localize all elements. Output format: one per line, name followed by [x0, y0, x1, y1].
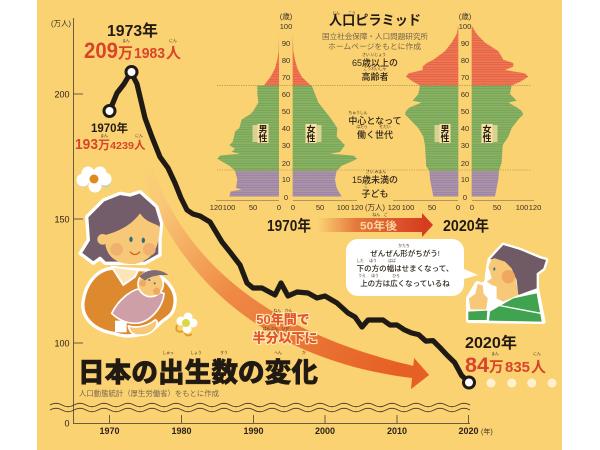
callout: 2020: 84 — [465, 354, 489, 377]
pyramid heading: こう — [348, 10, 356, 16]
age group label: working: はたら — [356, 124, 368, 129]
pyramid age labels 1970: 90 — [282, 39, 290, 48]
pyramid age labels 1970: 0 — [284, 193, 288, 202]
pyramid age labels 1970 — [280, 11, 293, 202]
age group label: working — [348, 110, 402, 140]
callout: 1973: 人 — [166, 45, 181, 62]
line chart: births — [104, 66, 474, 388]
arrow: 50 years later — [318, 212, 433, 237]
pyramid age labels 2020: 30 — [461, 141, 469, 150]
x axis labels: 1990 — [243, 426, 264, 436]
pyramid age labels 1970: 10 — [282, 175, 290, 184]
pyramid age labels 1970: 40 — [282, 124, 290, 133]
callout: 2020: 万 — [489, 360, 504, 376]
pyramid source: ホームページをもとに作成 — [328, 42, 422, 51]
pyramid scale labels: 50 — [428, 203, 436, 212]
gender label: male 1970: 男 — [258, 124, 268, 134]
age group label: elderly: 高齢者 — [361, 71, 389, 82]
gender label: female 1970: 女 — [306, 124, 316, 134]
speech bubble: ほう — [371, 273, 379, 278]
age group label: working: ちゅうしん — [349, 110, 368, 115]
x axis labels: 2020 — [458, 426, 479, 436]
speech bubble: ほう — [369, 258, 377, 263]
mother body — [83, 267, 175, 336]
speech bubble: した — [356, 258, 364, 263]
gender label: male 2020 — [434, 124, 450, 144]
pyramid age labels 1970: 100 — [280, 22, 292, 31]
callout: 1970: 1970年 — [91, 121, 128, 135]
x axis labels: (年) — [481, 427, 493, 436]
y axis labels: 0 — [64, 418, 70, 428]
callout: 1970 — [75, 121, 146, 153]
pyramid age labels 1970: 30 — [282, 141, 290, 150]
callout: 2020: 人 — [531, 359, 546, 376]
pyramid age labels 2020: (歳) — [459, 11, 472, 21]
pyramid scale labels: 120 — [351, 203, 363, 212]
pyramid age labels 2020: 60 — [461, 90, 469, 99]
population pyramid 1970 — [217, 34, 357, 197]
gender label: female 2020 — [482, 124, 498, 144]
population pyramid 2020 — [405, 25, 528, 196]
speech bubble: ぜんぜん形がちがう! — [370, 248, 440, 258]
pyramid scale labels: 50 — [493, 203, 501, 212]
gender label: male 1970 — [252, 124, 268, 144]
arrow: 50 years later: ねん ご — [372, 212, 388, 217]
pyramid age labels 1970: 50 — [282, 107, 290, 116]
callout: 2020: にん — [533, 351, 541, 356]
callout: 2020 — [465, 333, 546, 377]
callout: 2020: まん — [491, 351, 499, 356]
callout: 1970: 4239 — [110, 140, 134, 152]
y axis labels: (万人) — [51, 19, 71, 28]
y axis labels: 200 — [54, 90, 70, 100]
y axis labels: 150 — [54, 214, 70, 224]
age group label: elderly — [352, 52, 398, 82]
year label 2020: 2020年 — [443, 216, 489, 235]
marker: 1973 — [126, 66, 137, 78]
marker: 2020 — [464, 377, 474, 388]
title: しゅっ — [162, 350, 174, 355]
speech bubble: うえ — [358, 273, 366, 278]
pyramid scale labels: 50 — [316, 203, 324, 212]
callout: 1973 — [84, 21, 181, 63]
title: しょう — [190, 350, 202, 355]
callout: 1973: 1973年 — [107, 21, 158, 40]
pyramid scale labels: 50 — [249, 203, 257, 212]
axis break wave — [50, 403, 470, 412]
age group label: working: 中心となって — [348, 115, 402, 126]
pyramid scale labels: 0 — [277, 203, 281, 212]
age group label: elderly: こうれいしゃ — [364, 66, 387, 71]
y axis labels: 100 — [54, 338, 70, 348]
pyramid scale labels: 100 — [223, 203, 235, 212]
mother face — [105, 213, 159, 264]
x axis labels: 1970 — [99, 426, 120, 436]
icon: flower 1 — [76, 166, 112, 192]
marker: 1970 — [104, 106, 115, 116]
pyramid heading: じん — [332, 10, 340, 16]
gender label: female 1970: 性 — [306, 132, 316, 144]
callout: 1970: 人 — [134, 139, 146, 152]
age group label: children: こ — [364, 183, 368, 188]
age group label: children: さい みまん — [366, 169, 386, 174]
year label 1970: 1970年 — [267, 216, 311, 235]
pyramid scale labels: 120 — [388, 203, 400, 212]
chart axes — [73, 18, 470, 424]
age group label: elderly: さい いじょう — [362, 52, 386, 57]
callout: 2020: 835 — [505, 359, 530, 376]
arrow label — [252, 308, 318, 346]
pyramid age labels 1970: (歳) — [280, 11, 293, 21]
pyramid age labels 2020: 0 — [463, 193, 467, 202]
pyramid age labels 1970: 80 — [282, 56, 290, 65]
pyramid source — [322, 32, 429, 51]
y axis labels — [51, 19, 71, 428]
age group label: children: 子ども — [361, 189, 389, 199]
icon: man — [468, 245, 546, 322]
speech bubble: ひろ — [392, 273, 400, 278]
callout: 2020: 2020年 — [465, 333, 517, 352]
x axis labels: 1980 — [171, 426, 192, 436]
pyramid scale labels — [210, 203, 541, 212]
speech bubble: かたち — [398, 243, 410, 248]
pyramid age labels 2020: 20 — [461, 159, 469, 168]
pyramid age labels 2020: 90 — [461, 39, 469, 48]
pyramid source: 国立社会保障・人口問題研究所 — [322, 32, 429, 41]
icon: mother and baby — [80, 192, 175, 336]
callout: 1970: 万 — [98, 138, 110, 152]
pyramid scale labels: 0 — [291, 203, 295, 212]
pyramid scale labels: 100 — [516, 203, 528, 212]
arrow: 50 years later: 50年後 — [360, 218, 397, 232]
gender label: male 2020: 性 — [440, 132, 450, 144]
pyramid age labels 2020: 50 — [461, 107, 469, 116]
title: すう — [220, 350, 228, 355]
gender label: male 2020: 男 — [440, 124, 450, 134]
callout: 1970: にん — [135, 133, 143, 138]
callout: 1973: 万 — [118, 45, 133, 62]
arrow label: 50年間で — [256, 312, 310, 327]
callout: 1973: まん — [122, 38, 130, 43]
callout: 1970: まん — [100, 133, 108, 138]
title: へん — [274, 350, 282, 355]
callout: 1973: にん — [169, 38, 177, 43]
speech bubble — [346, 239, 478, 296]
age group label: working: 働く世代 — [357, 129, 393, 140]
pyramid age labels 1970: 60 — [282, 90, 290, 99]
icon: flower 2 — [176, 312, 198, 335]
pyramid scale labels: 100 — [402, 203, 414, 212]
curved orange arrow — [138, 160, 429, 389]
speech bubble: 下の方の幅はせまくなって、 — [357, 263, 453, 273]
pyramid age labels 2020: 70 — [461, 73, 469, 82]
title: か — [302, 350, 306, 355]
chart source: 人口動態統計（厚生労働省）をもとに作成 — [79, 389, 220, 398]
pyramid age labels 2020 — [459, 11, 472, 202]
x axis labels: 2010 — [387, 426, 407, 436]
pyramid scale labels: 120 — [529, 203, 541, 212]
age group label: children — [352, 169, 398, 199]
gender label: female 1970 — [306, 124, 322, 144]
callout: 1973: 209 — [84, 38, 118, 63]
pyramid scale labels: (万人) — [365, 203, 385, 212]
title: 日本の出生数の変化 — [78, 358, 318, 388]
pyramid scale labels: 0 — [470, 203, 474, 212]
pyramid heading: 人口ピラミッド — [329, 13, 421, 28]
pyramid age labels 1970: 70 — [282, 73, 290, 82]
callout: 1970: 193 — [75, 137, 98, 153]
mother hair — [80, 192, 162, 263]
arrow label: ねん かん — [274, 308, 293, 313]
gender label: male 1970: 性 — [258, 132, 268, 144]
pyramid scale labels: 120 — [210, 203, 222, 212]
arrow label: はんぶん いか — [263, 326, 289, 331]
gender label: female 2020: 性 — [482, 132, 492, 144]
x axis labels — [99, 426, 493, 436]
arrow label: 半分以下に — [252, 330, 318, 346]
x axis labels: 2000 — [315, 426, 335, 436]
callout: 1973: 1983 — [134, 45, 165, 62]
pyramid scale labels: 0 — [456, 203, 460, 212]
age group label: elderly: 65歳以上の — [352, 57, 398, 68]
speech bubble: はば — [388, 258, 396, 263]
gender label: female 2020: 女 — [482, 124, 492, 134]
age group label: working: せだい — [379, 124, 391, 129]
dots after 2020 — [486, 378, 556, 388]
speech bubble: 上の方は広くなっているね — [360, 278, 450, 288]
pyramid age labels 2020: 80 — [461, 56, 469, 65]
pyramid age labels 2020: 100 — [459, 22, 471, 31]
pyramid age labels 2020: 10 — [461, 175, 469, 184]
pyramid age labels 2020: 40 — [461, 124, 469, 133]
baby — [112, 270, 168, 323]
pyramid scale labels: 100 — [337, 203, 349, 212]
age group label: children: 15歳未満の — [352, 174, 398, 185]
pyramid age labels 1970: 20 — [282, 159, 290, 168]
